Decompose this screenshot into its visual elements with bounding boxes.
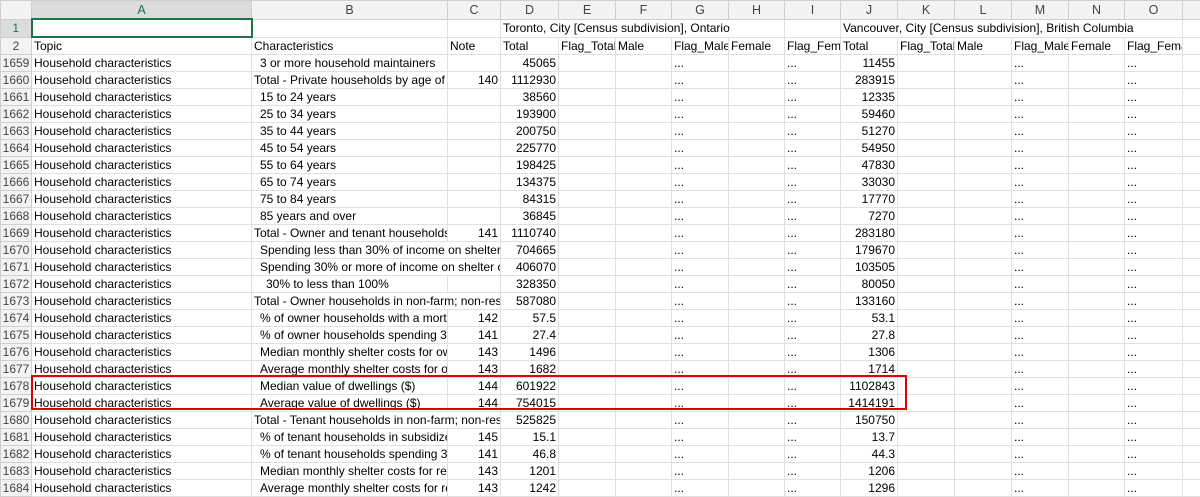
spreadsheet grid: ... bbox=[1014, 141, 1024, 155]
spreadsheet grid: ... bbox=[787, 447, 797, 461]
spreadsheet grid: ... bbox=[1127, 192, 1137, 206]
spreadsheet grid: Female bbox=[731, 39, 771, 53]
spreadsheet grid: 1110740 bbox=[511, 226, 556, 240]
spreadsheet grid: ... bbox=[1127, 243, 1137, 257]
spreadsheet grid: ... bbox=[787, 192, 797, 206]
spreadsheet grid: 12335 bbox=[862, 90, 895, 104]
spreadsheet grid: 283915 bbox=[855, 73, 895, 87]
spreadsheet grid: M bbox=[1035, 3, 1045, 17]
spreadsheet grid: 15.1 bbox=[533, 430, 556, 444]
spreadsheet grid: 1676 bbox=[3, 345, 29, 359]
spreadsheet grid: 1680 bbox=[3, 413, 29, 427]
spreadsheet grid: 1201 bbox=[529, 464, 556, 478]
spreadsheet grid: 1684 bbox=[3, 481, 29, 495]
spreadsheet grid: 406070 bbox=[516, 260, 556, 274]
spreadsheet grid: Household characteristics bbox=[34, 345, 171, 359]
spreadsheet grid: 53.1 bbox=[872, 311, 895, 325]
spreadsheet grid: ... bbox=[674, 464, 684, 478]
spreadsheet grid: Flag_Male bbox=[1014, 39, 1068, 53]
spreadsheet grid: ... bbox=[787, 209, 797, 223]
spreadsheet grid: ... bbox=[1127, 141, 1137, 155]
spreadsheet grid: Household characteristics bbox=[34, 311, 171, 325]
spreadsheet grid: 1683 bbox=[3, 464, 29, 478]
spreadsheet grid: ... bbox=[787, 311, 797, 325]
spreadsheet grid: J bbox=[866, 3, 872, 17]
spreadsheet grid: Flag_Male bbox=[674, 39, 728, 53]
spreadsheet grid: ... bbox=[787, 124, 797, 138]
spreadsheet grid: L bbox=[980, 3, 986, 17]
spreadsheet grid: 754015 bbox=[516, 396, 556, 410]
spreadsheet grid: Household characteristics bbox=[34, 362, 171, 376]
spreadsheet grid: ... bbox=[1127, 447, 1137, 461]
spreadsheet grid: ... bbox=[674, 396, 684, 410]
spreadsheet grid: ... bbox=[674, 328, 684, 342]
spreadsheet grid: ... bbox=[1014, 124, 1024, 138]
spreadsheet grid: ... bbox=[1127, 56, 1137, 70]
spreadsheet grid: ... bbox=[674, 294, 684, 308]
spreadsheet grid: ... bbox=[1014, 260, 1024, 274]
spreadsheet grid: 1681 bbox=[3, 430, 29, 444]
spreadsheet grid: ... bbox=[787, 481, 797, 495]
spreadsheet grid: ... bbox=[787, 464, 797, 478]
spreadsheet grid: Toronto, City [Census subdivision], Ontario bbox=[503, 21, 730, 35]
spreadsheet grid: Total bbox=[843, 39, 868, 53]
spreadsheet grid: Total - Owner and tenant households bbox=[254, 226, 448, 240]
spreadsheet grid: 47830 bbox=[862, 158, 895, 172]
spreadsheet grid: 587080 bbox=[516, 294, 556, 308]
spreadsheet grid: 134375 bbox=[516, 175, 556, 189]
spreadsheet grid: ... bbox=[674, 447, 684, 461]
spreadsheet grid: ... bbox=[1127, 379, 1137, 393]
spreadsheet grid: ... bbox=[674, 90, 684, 104]
spreadsheet grid: ... bbox=[787, 90, 797, 104]
spreadsheet grid: N bbox=[1092, 3, 1101, 17]
spreadsheet grid: 1673 bbox=[3, 294, 29, 308]
spreadsheet grid: ... bbox=[787, 277, 797, 291]
spreadsheet grid: I bbox=[811, 3, 814, 17]
spreadsheet grid: 35 to 44 years bbox=[260, 124, 336, 138]
spreadsheet grid: ... bbox=[1014, 90, 1024, 104]
spreadsheet grid: ... bbox=[674, 379, 684, 393]
spreadsheet grid: 1206 bbox=[868, 464, 895, 478]
spreadsheet grid: 45065 bbox=[523, 56, 556, 70]
spreadsheet grid: 36845 bbox=[523, 209, 556, 223]
spreadsheet grid: 145 bbox=[478, 430, 498, 444]
spreadsheet grid: Household characteristics bbox=[34, 396, 171, 410]
spreadsheet grid: ... bbox=[787, 141, 797, 155]
spreadsheet grid: 27.4 bbox=[533, 328, 556, 342]
spreadsheet grid: ... bbox=[787, 396, 797, 410]
spreadsheet grid: 46.8 bbox=[533, 447, 556, 461]
spreadsheet grid: 1714 bbox=[868, 362, 895, 376]
spreadsheet grid: ... bbox=[1127, 73, 1137, 87]
spreadsheet grid: ... bbox=[674, 175, 684, 189]
spreadsheet grid: 198425 bbox=[516, 158, 556, 172]
spreadsheet grid: B bbox=[345, 3, 354, 17]
spreadsheet grid: 1677 bbox=[3, 362, 29, 376]
spreadsheet grid: Household characteristics bbox=[34, 277, 171, 291]
spreadsheet grid: ... bbox=[674, 192, 684, 206]
spreadsheet grid: Flag_Total bbox=[561, 39, 616, 53]
spreadsheet grid: ... bbox=[787, 294, 797, 308]
spreadsheet grid: 1102843 bbox=[849, 379, 895, 393]
spreadsheet grid: 38560 bbox=[523, 90, 556, 104]
spreadsheet grid: 1678 bbox=[3, 379, 29, 393]
spreadsheet grid: ... bbox=[674, 430, 684, 444]
spreadsheet grid: ... bbox=[674, 158, 684, 172]
spreadsheet grid: ... bbox=[1014, 430, 1024, 444]
spreadsheet grid: ... bbox=[1127, 124, 1137, 138]
spreadsheet grid: D bbox=[525, 3, 534, 17]
spreadsheet grid: ... bbox=[1014, 447, 1024, 461]
spreadsheet grid: 704665 bbox=[516, 243, 556, 257]
spreadsheet grid: 30% to less than 100% bbox=[266, 277, 389, 291]
spreadsheet grid: Household characteristics bbox=[34, 481, 171, 495]
spreadsheet grid: ... bbox=[674, 413, 684, 427]
spreadsheet grid: ... bbox=[1014, 226, 1024, 240]
spreadsheet grid: 65 to 74 years bbox=[260, 175, 336, 189]
spreadsheet grid: Household characteristics bbox=[34, 175, 171, 189]
spreadsheet grid: 1660 bbox=[3, 73, 29, 87]
spreadsheet grid: ... bbox=[674, 362, 684, 376]
spreadsheet grid: 1664 bbox=[3, 141, 29, 155]
spreadsheet grid: ... bbox=[787, 430, 797, 444]
spreadsheet grid: Household characteristics bbox=[34, 413, 171, 427]
spreadsheet grid: ... bbox=[1014, 328, 1024, 342]
spreadsheet grid: Household characteristics bbox=[34, 90, 171, 104]
spreadsheet grid: G bbox=[695, 3, 705, 17]
spreadsheet grid: ... bbox=[1014, 345, 1024, 359]
spreadsheet grid: Household characteristics bbox=[34, 430, 171, 444]
spreadsheet grid: ... bbox=[1127, 396, 1137, 410]
spreadsheet grid: 141 bbox=[478, 328, 498, 342]
spreadsheet grid: ... bbox=[674, 226, 684, 240]
spreadsheet grid: 1665 bbox=[3, 158, 29, 172]
spreadsheet grid: 7270 bbox=[868, 209, 895, 223]
spreadsheet grid: 283180 bbox=[855, 226, 895, 240]
spreadsheet grid: ... bbox=[1014, 56, 1024, 70]
spreadsheet grid: ... bbox=[1127, 362, 1137, 376]
spreadsheet grid: 144 bbox=[478, 379, 498, 393]
spreadsheet grid: 27.8 bbox=[872, 328, 895, 342]
spreadsheet grid: ... bbox=[674, 107, 684, 121]
spreadsheet grid: Flag_Total bbox=[900, 39, 954, 53]
spreadsheet grid: 601922 bbox=[516, 379, 556, 393]
spreadsheet grid: 179670 bbox=[855, 243, 895, 257]
spreadsheet grid: 141 bbox=[478, 447, 498, 461]
spreadsheet grid: Household characteristics bbox=[34, 226, 171, 240]
spreadsheet grid: 45 to 54 years bbox=[260, 141, 336, 155]
callout: highlighted dwelling value rows bbox=[31, 375, 907, 410]
spreadsheet grid: ... bbox=[787, 73, 797, 87]
spreadsheet grid: ... bbox=[787, 56, 797, 70]
spreadsheet grid: ... bbox=[1127, 90, 1137, 104]
spreadsheet grid: ... bbox=[1014, 464, 1024, 478]
spreadsheet grid: 144 bbox=[478, 396, 498, 410]
spreadsheet grid: 15 to 24 years bbox=[260, 90, 336, 104]
spreadsheet grid: ... bbox=[674, 311, 684, 325]
spreadsheet grid: 33030 bbox=[862, 175, 895, 189]
spreadsheet grid: Household characteristics bbox=[34, 73, 171, 87]
spreadsheet grid: ... bbox=[787, 362, 797, 376]
spreadsheet grid: ... bbox=[1014, 175, 1024, 189]
spreadsheet grid: Vancouver, City [Census subdivision], British Columbia bbox=[843, 21, 1134, 35]
spreadsheet grid: Household characteristics bbox=[34, 447, 171, 461]
spreadsheet grid: 225770 bbox=[516, 141, 556, 155]
spreadsheet grid: Median value of dwellings ($) bbox=[260, 379, 415, 393]
spreadsheet grid: Household characteristics bbox=[34, 464, 171, 478]
spreadsheet grid: Household characteristics bbox=[34, 379, 171, 393]
spreadsheet grid: Household characteristics bbox=[34, 158, 171, 172]
spreadsheet grid: Total bbox=[503, 39, 528, 53]
spreadsheet grid: ... bbox=[1127, 209, 1137, 223]
spreadsheet grid: ... bbox=[1127, 107, 1137, 121]
spreadsheet grid: 1662 bbox=[3, 107, 29, 121]
spreadsheet grid: 200750 bbox=[516, 124, 556, 138]
spreadsheet grid: ... bbox=[1127, 158, 1137, 172]
spreadsheet grid: Female bbox=[1071, 39, 1111, 53]
spreadsheet grid: ... bbox=[787, 379, 797, 393]
spreadsheet grid: ... bbox=[1014, 362, 1024, 376]
spreadsheet grid: 1112930 bbox=[511, 73, 556, 87]
spreadsheet grid: 1682 bbox=[529, 362, 556, 376]
spreadsheet grid: 84315 bbox=[523, 192, 556, 206]
spreadsheet grid: 1672 bbox=[3, 277, 29, 291]
spreadsheet grid: ... bbox=[1014, 396, 1024, 410]
spreadsheet grid: 1667 bbox=[3, 192, 29, 206]
spreadsheet grid: Household characteristics bbox=[34, 107, 171, 121]
spreadsheet grid: 1668 bbox=[3, 209, 29, 223]
spreadsheet grid: ... bbox=[1127, 175, 1137, 189]
spreadsheet grid: ... bbox=[787, 413, 797, 427]
spreadsheet grid: ... bbox=[787, 175, 797, 189]
spreadsheet grid: 1669 bbox=[3, 226, 29, 240]
spreadsheet grid: A bbox=[137, 2, 146, 16]
spreadsheet grid: 1675 bbox=[3, 328, 29, 342]
spreadsheet grid: ... bbox=[1014, 73, 1024, 87]
spreadsheet grid: ... bbox=[1127, 413, 1137, 427]
spreadsheet grid: ... bbox=[1014, 243, 1024, 257]
spreadsheet grid: Household characteristics bbox=[34, 56, 171, 70]
spreadsheet grid: Male bbox=[618, 39, 644, 53]
spreadsheet grid: ... bbox=[787, 260, 797, 274]
spreadsheet grid: Male bbox=[957, 39, 983, 53]
spreadsheet grid: 80050 bbox=[862, 277, 895, 291]
spreadsheet grid: 1671 bbox=[3, 260, 29, 274]
spreadsheet grid: 57.5 bbox=[533, 311, 556, 325]
spreadsheet grid: 143 bbox=[478, 481, 498, 495]
spreadsheet grid: 193900 bbox=[516, 107, 556, 121]
spreadsheet grid: 1679 bbox=[3, 396, 29, 410]
spreadsheet grid: 17770 bbox=[862, 192, 895, 206]
spreadsheet grid: ... bbox=[1127, 481, 1137, 495]
spreadsheet grid: Household characteristics bbox=[34, 260, 171, 274]
spreadsheet grid: ... bbox=[674, 345, 684, 359]
spreadsheet grid: ... bbox=[674, 56, 684, 70]
spreadsheet grid: ... bbox=[1014, 277, 1024, 291]
spreadsheet grid: Note bbox=[450, 39, 475, 53]
spreadsheet grid: ... bbox=[674, 481, 684, 495]
spreadsheet grid: 140 bbox=[478, 73, 498, 87]
spreadsheet grid: ... bbox=[787, 243, 797, 257]
spreadsheet grid: ... bbox=[1014, 158, 1024, 172]
spreadsheet grid: Household characteristics bbox=[34, 192, 171, 206]
spreadsheet grid: 1661 bbox=[3, 90, 29, 104]
spreadsheet grid: 1674 bbox=[3, 311, 29, 325]
spreadsheet grid: C bbox=[469, 3, 479, 17]
spreadsheet grid: 1414191 bbox=[848, 396, 895, 410]
spreadsheet grid: Characteristics bbox=[254, 39, 333, 53]
spreadsheet grid: ... bbox=[787, 345, 797, 359]
spreadsheet grid: 75 to 84 years bbox=[260, 192, 336, 206]
spreadsheet grid: 2 bbox=[13, 39, 19, 53]
spreadsheet grid: ... bbox=[1014, 481, 1024, 495]
spreadsheet grid: Average value of dwellings ($) bbox=[260, 396, 421, 410]
spreadsheet grid: 328350 bbox=[516, 277, 556, 291]
spreadsheet grid: ... bbox=[674, 73, 684, 87]
spreadsheet grid: 141 bbox=[478, 226, 498, 240]
spreadsheet grid: 1659 bbox=[3, 56, 29, 70]
spreadsheet grid: ... bbox=[1127, 260, 1137, 274]
spreadsheet grid: H bbox=[752, 3, 761, 17]
spreadsheet grid: ... bbox=[674, 141, 684, 155]
spreadsheet grid: ... bbox=[1127, 294, 1137, 308]
spreadsheet grid: 1496 bbox=[529, 345, 556, 359]
spreadsheet grid: 1242 bbox=[529, 481, 556, 495]
spreadsheet grid: F bbox=[640, 3, 647, 17]
spreadsheet grid: Total - Private households by age of bbox=[254, 73, 445, 87]
spreadsheet grid: 59460 bbox=[862, 107, 895, 121]
spreadsheet grid: E bbox=[583, 3, 591, 17]
spreadsheet grid: ... bbox=[787, 158, 797, 172]
spreadsheet grid: 1670 bbox=[3, 243, 29, 257]
spreadsheet grid: 143 bbox=[478, 345, 498, 359]
spreadsheet grid: Household characteristics bbox=[34, 328, 171, 342]
spreadsheet grid: ... bbox=[1127, 328, 1137, 342]
spreadsheet grid: ... bbox=[1014, 107, 1024, 121]
spreadsheet grid: ... bbox=[674, 209, 684, 223]
spreadsheet grid: 1296 bbox=[868, 481, 895, 495]
spreadsheet grid: 143 bbox=[478, 362, 498, 376]
spreadsheet grid: ... bbox=[1014, 379, 1024, 393]
spreadsheet grid: 85 years and over bbox=[260, 209, 356, 223]
spreadsheet grid: 1666 bbox=[3, 175, 29, 189]
spreadsheet grid: K bbox=[922, 3, 930, 17]
spreadsheet grid: 142 bbox=[478, 311, 498, 325]
spreadsheet grid: ... bbox=[1127, 311, 1137, 325]
spreadsheet grid: ... bbox=[1014, 209, 1024, 223]
spreadsheet grid: 143 bbox=[478, 464, 498, 478]
spreadsheet grid: ... bbox=[787, 226, 797, 240]
spreadsheet grid: Household characteristics bbox=[34, 294, 171, 308]
spreadsheet grid: 150750 bbox=[855, 413, 895, 427]
spreadsheet grid: Household characteristics bbox=[34, 209, 171, 223]
spreadsheet grid: 1 bbox=[12, 21, 19, 35]
spreadsheet grid: 3 or more household maintainers bbox=[260, 56, 435, 70]
spreadsheet grid: 54950 bbox=[862, 141, 895, 155]
spreadsheet grid: ... bbox=[1014, 192, 1024, 206]
spreadsheet grid: ... bbox=[674, 277, 684, 291]
spreadsheet grid: ... bbox=[674, 243, 684, 257]
spreadsheet grid: ... bbox=[787, 107, 797, 121]
spreadsheet grid: ... bbox=[1127, 464, 1137, 478]
spreadsheet grid: ... bbox=[787, 328, 797, 342]
spreadsheet grid: 1682 bbox=[3, 447, 29, 461]
spreadsheet grid: 55 to 64 years bbox=[260, 158, 336, 172]
spreadsheet grid: ... bbox=[1127, 345, 1137, 359]
spreadsheet grid: ... bbox=[1127, 226, 1137, 240]
spreadsheet grid: 44.3 bbox=[872, 447, 895, 461]
spreadsheet grid: ... bbox=[674, 260, 684, 274]
spreadsheet grid: ... bbox=[1014, 413, 1024, 427]
spreadsheet grid: 11455 bbox=[863, 56, 895, 70]
spreadsheet grid: ... bbox=[1014, 311, 1024, 325]
spreadsheet grid: Topic bbox=[34, 39, 62, 53]
spreadsheet grid: 51270 bbox=[862, 124, 895, 138]
spreadsheet grid: 13.7 bbox=[872, 430, 895, 444]
spreadsheet grid: Household characteristics bbox=[34, 141, 171, 155]
spreadsheet grid: 103505 bbox=[855, 260, 895, 274]
spreadsheet grid: Household characteristics bbox=[34, 243, 171, 257]
spreadsheet grid: 133160 bbox=[855, 294, 895, 308]
spreadsheet grid: 525825 bbox=[516, 413, 556, 427]
spreadsheet grid: ... bbox=[1127, 430, 1137, 444]
spreadsheet grid: ... bbox=[674, 124, 684, 138]
spreadsheet grid: ... bbox=[1014, 294, 1024, 308]
spreadsheet grid: 1663 bbox=[3, 124, 29, 138]
spreadsheet grid: 1306 bbox=[868, 345, 895, 359]
spreadsheet grid: ... bbox=[1127, 277, 1137, 291]
spreadsheet grid: Household characteristics bbox=[34, 124, 171, 138]
spreadsheet grid: O bbox=[1149, 3, 1158, 17]
spreadsheet grid: 25 to 34 years bbox=[260, 107, 336, 121]
